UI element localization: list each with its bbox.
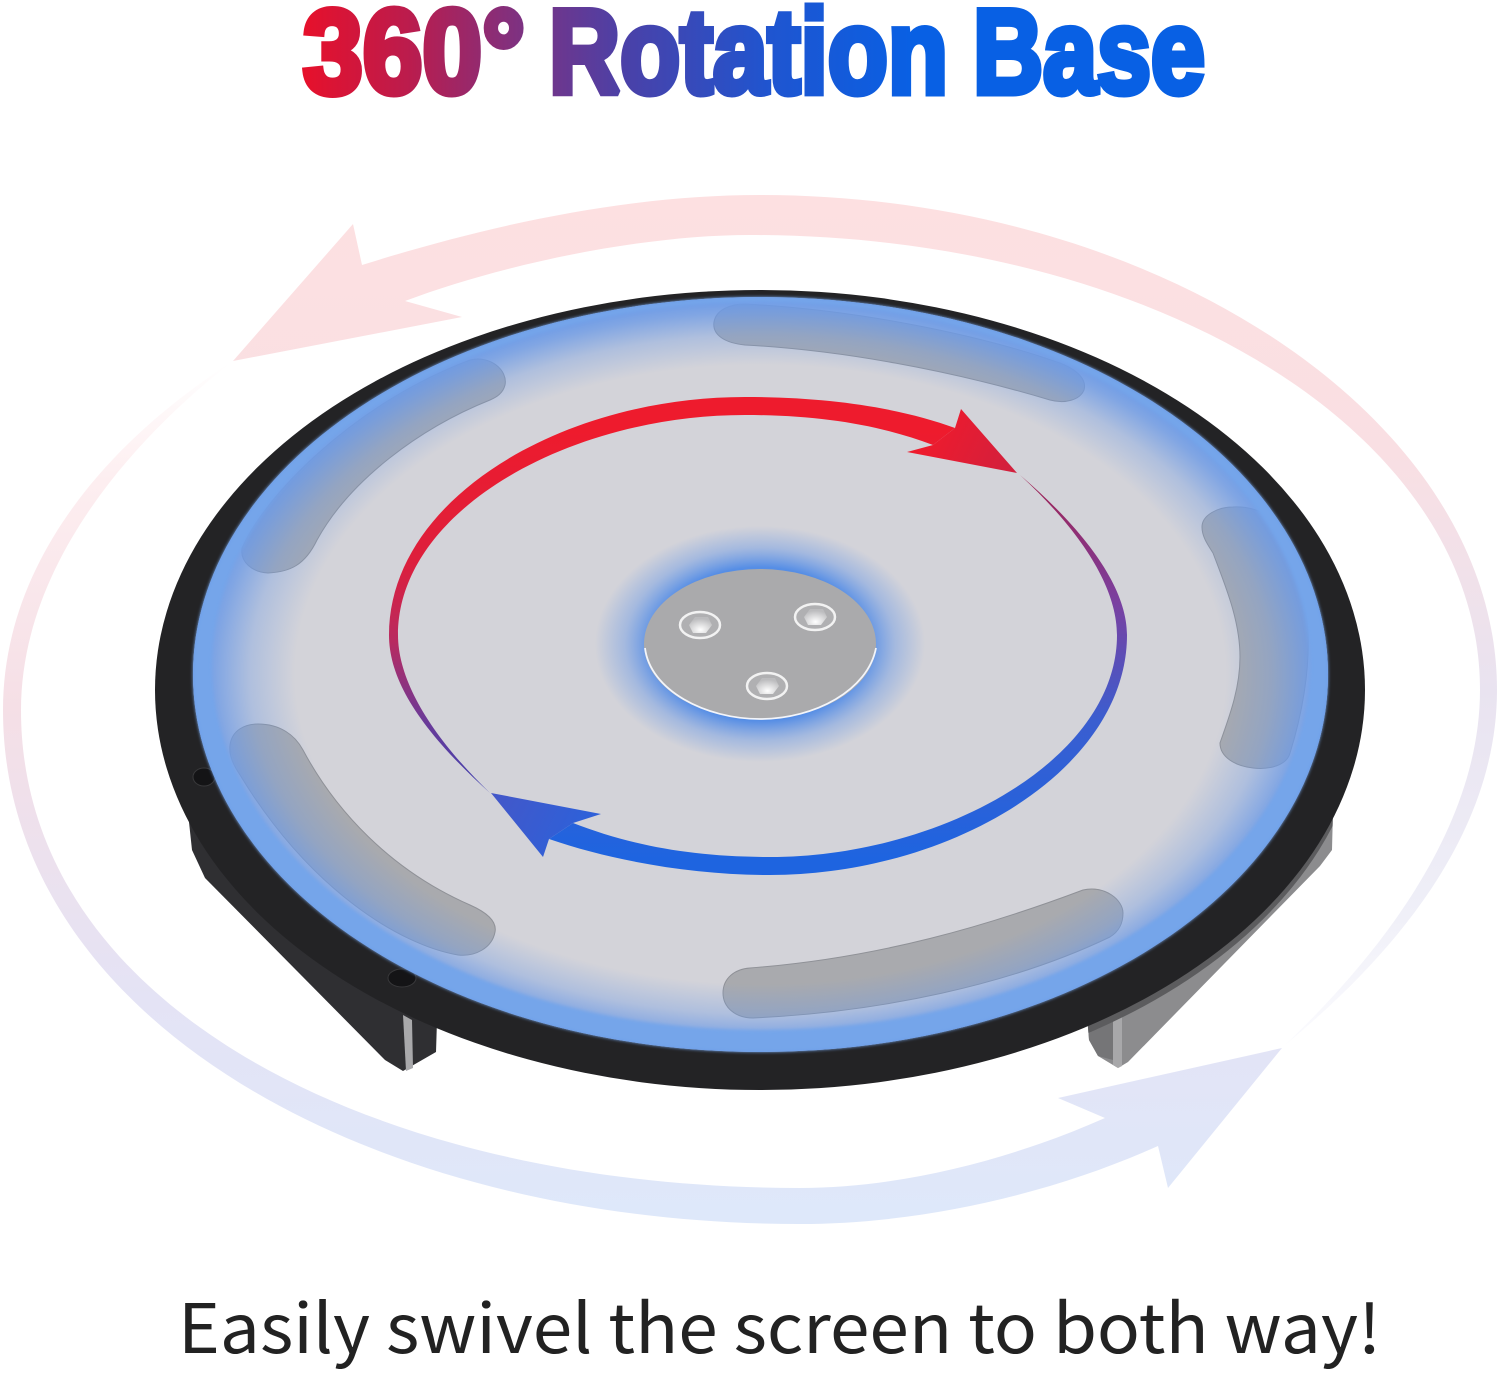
- title: [303, 0, 1205, 119]
- center metal plate: [644, 569, 876, 719]
- screw: left: [680, 612, 720, 638]
- support foot: left: [189, 822, 437, 1071]
- screw: left rim upper: [193, 768, 215, 786]
- inner arrow: red clockwise: [389, 397, 1017, 793]
- black base ring: [155, 290, 1365, 1090]
- support foot: right: [1088, 818, 1333, 1068]
- rubber pads: [230, 304, 1308, 1018]
- screw: left rim lower: [388, 969, 416, 987]
- center hub glow: [595, 526, 925, 762]
- caption: Easily swivel the screen to both way!: [178, 1274, 1381, 1373]
- inner arrow: blue counter-clockwise: [491, 475, 1127, 875]
- outer rotation arrow: clockwise blue: [3, 361, 1282, 1224]
- outer rotation arrow: counter-clockwise pink: [233, 195, 1497, 1045]
- turntable surface: [193, 297, 1328, 1052]
- screw: bottom: [747, 673, 787, 699]
- screw: right: [795, 604, 835, 630]
- blue rim glow: [193, 297, 1328, 1052]
